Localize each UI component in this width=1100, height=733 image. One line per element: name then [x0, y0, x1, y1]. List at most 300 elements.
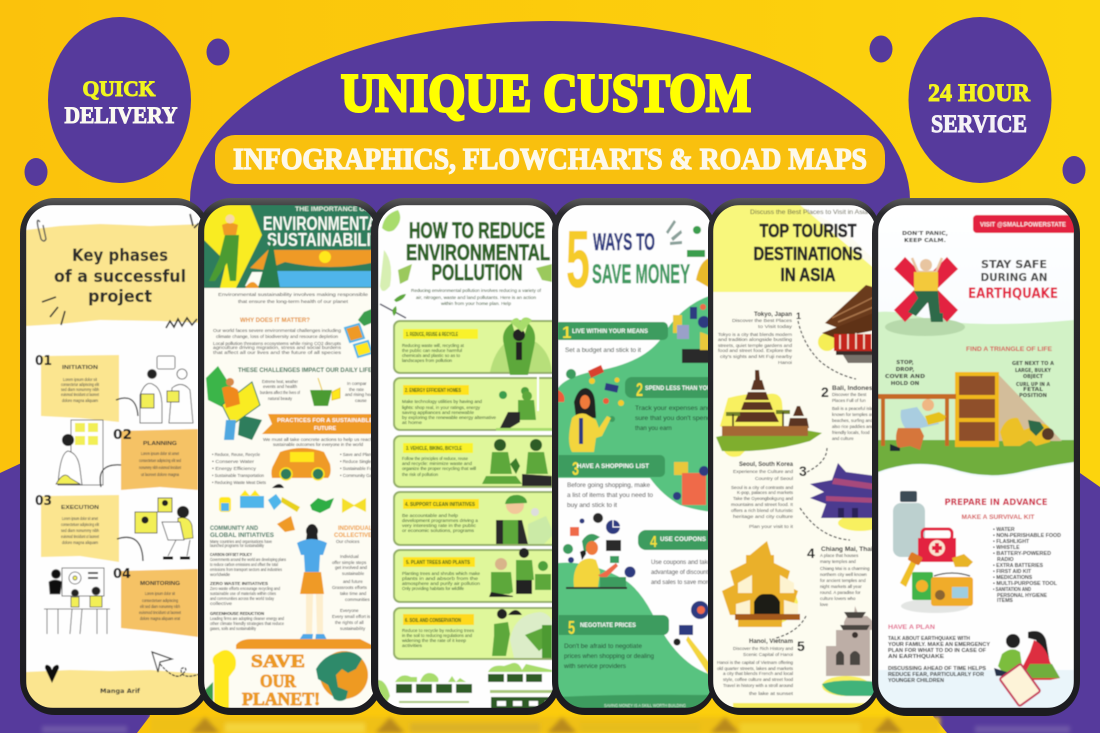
illustration: woman in yellow jacket — [569, 388, 611, 452]
stop 3 seoul: K-pop, palaces and markets — [737, 490, 794, 495]
bottom: save our planet: OUR — [260, 671, 297, 691]
text: stop drop — [885, 360, 925, 387]
step 03 execution: consectetuer adipiscing elit — [61, 522, 100, 527]
stop 4 chiang mai — [807, 545, 886, 607]
intro text — [411, 288, 542, 306]
card 3 — [394, 436, 564, 487]
stop 2 bali: and culture — [832, 436, 854, 441]
section: community and global initiatives: sustainable use of materials within cities — [210, 591, 277, 596]
section: community and global initiatives: collective — [210, 601, 233, 606]
section: community and global initiatives: to reduce carbon emissions and offset the total — [210, 562, 278, 567]
text right of girl: Our choices — [336, 539, 360, 544]
illustration: japanese temple — [818, 285, 876, 363]
orange banner: practices: PRACTICES FOR A SUSTAINABLE — [277, 418, 373, 424]
card 3: the risk of pollution — [402, 472, 439, 477]
title: DESTINATIONS — [754, 244, 862, 264]
icon: paper plane with trail — [152, 652, 202, 676]
header banner — [204, 205, 390, 288]
section: why does it matter: climate change, loss of biodiversity and resource depletion — [216, 334, 339, 339]
badge: quick delivery — [48, 17, 191, 183]
section: why does it matter: that affect all our lives and the future of all species — [213, 350, 342, 355]
orange banner: practices — [262, 414, 376, 434]
step 3 bar — [548, 455, 665, 479]
text right of basket: In compar — [347, 381, 367, 386]
card 1: landscapes from pollution — [402, 358, 453, 363]
text: stop drop: STOP, — [896, 360, 914, 366]
orange banner: practices: FUTURE — [314, 426, 336, 432]
bullet list right: • Save and Plant — [340, 452, 373, 457]
step 2 text: than you earn — [635, 426, 672, 432]
card 5: Only providing habitats for wildlife — [402, 586, 465, 591]
step 01 initiation: euismod tincidunt ut laoreet — [61, 392, 100, 397]
text right of basket — [344, 382, 371, 402]
stop 3 seoul: heritage and city culture — [733, 514, 794, 519]
stop 3 seoul: Country of Seoul — [755, 476, 793, 481]
title: TOP TOURIST — [760, 221, 856, 241]
section: these challenges: THESE CHALLENGES IMPACT OUR DAILY LIFE — [238, 368, 372, 374]
step 5 bar: NEGOTIATE PRICES — [580, 623, 636, 629]
title: stay safe — [968, 258, 1058, 302]
title: stay safe: DURING AN — [980, 271, 1048, 284]
stop 3 seoul: mountains and street food. It — [731, 502, 794, 507]
text: next to object — [1012, 361, 1054, 399]
illustration: woman holding heart leaves — [490, 317, 552, 375]
red tag: VISIT @SMALLPOWERSTATE — [980, 222, 1066, 228]
text: next to object: FETAL — [1023, 387, 1044, 393]
section: community and global initiatives: Many countries and organisations have — [210, 539, 272, 544]
illustration: two people gardening — [482, 439, 552, 486]
step 4 text — [651, 560, 712, 586]
card 2: 2. ENERGY EFFICIENT HOMES — [405, 388, 461, 394]
step 4 text: advantage of discounts — [651, 570, 711, 576]
section: why does it matter: Local pollution threatens ecosystems while rising CO2 disrupts — [213, 341, 342, 346]
step 03 execution: euismod tincidunt ut laoreet — [61, 534, 100, 539]
step 5 bar: 5 — [568, 618, 575, 638]
card 6: in the soil to reducing regulations and — [402, 633, 473, 638]
bullet list left: • Conserve Water — [212, 459, 255, 464]
stop 1 tokyo: Tokyo, Japan — [754, 311, 792, 318]
text right of girl: sustainability — [340, 626, 366, 631]
heading: prepare in advance: MAKE A SURVIVAL KIT — [962, 514, 1035, 521]
intro text: air, nitrogen, waste and land pollutants. Here is an action — [416, 295, 537, 300]
header banner: SUSTAINABILITY — [267, 230, 390, 250]
intro text: within from your home plan. Help — [441, 301, 512, 306]
card 1: 1. REDUCE, REUSE & RECYCLE — [406, 332, 458, 338]
illustration: hand with card — [674, 601, 712, 676]
step 2 text: Track your expenses and — [635, 406, 711, 412]
stop 3 seoul: offers a rich blend of futuristic — [731, 508, 794, 513]
bullet list right: • Sustainable Food — [340, 466, 377, 471]
step 02 planning: ut laoreet dolore magna — [141, 472, 179, 477]
text right of girl: the rights of all — [335, 620, 364, 625]
text right of girl: and future — [343, 579, 363, 584]
floor reflection under phones — [42, 717, 1070, 733]
text: next to object: POSITION — [1019, 393, 1047, 399]
text: next to object: LARGE, BULKY — [1015, 368, 1051, 374]
illustration: shopper with charts — [563, 513, 636, 589]
stop 2 bali: Bali is a peaceful island — [832, 406, 878, 411]
stop 2 bali: also rice paddies and — [832, 424, 874, 429]
stop 1 tokyo: Tokyo is a city that blends modern — [718, 332, 793, 337]
card 5: Planting trees and shrubs which make — [402, 571, 481, 576]
illustration: protester with sign — [206, 366, 262, 440]
step 04 monitoring: dolore magna aliquam erat — [140, 616, 181, 621]
step 2 text: sure that you don't spend — [635, 416, 711, 422]
card 5: atmosphere and purify air pollution — [402, 581, 481, 586]
section: community and global initiatives: GREENHOUSE REDUCTION — [210, 611, 264, 616]
stop 5 hanoi: Hanoi is the capital of Vietnam offering — [717, 660, 794, 665]
card 1: the public can reduce harmful — [402, 348, 462, 353]
card 4: development programmes driving a — [402, 518, 479, 523]
text: don't panic: KEEP CALM. — [904, 238, 946, 244]
stop 5 hanoi: a city that blends French and local — [723, 671, 793, 676]
step 4 text: Use coupons and take — [651, 560, 712, 566]
plan text: YOUR FAMILY. MAKE AN EMERGENCY — [888, 642, 991, 648]
text beside protester: natural beauty — [268, 396, 293, 401]
icons floating — [558, 365, 624, 422]
section: community and global initiatives: emissions from transport sectors and industries — [210, 567, 283, 572]
panel: phone 5 top tourist destinations — [708, 198, 886, 715]
stop 3 seoul: Seoul, South Korea — [739, 461, 793, 468]
stop 5 hanoi: style, coffee culture and street food — [723, 677, 794, 682]
header banner: THE IMPORTANCE OF — [295, 206, 369, 213]
stop 2 bali: 2 — [821, 384, 829, 400]
icons: cubes — [345, 308, 374, 357]
text right of basket: cause — [355, 398, 367, 403]
supply list: PERSONAL HYGIENE — [997, 593, 1047, 599]
heading: prepare in advance: PREPARE IN ADVANCE — [944, 498, 1048, 508]
stop 5 hanoi: Hanoi, Vietnam — [749, 638, 793, 645]
plan text — [888, 636, 991, 684]
card 2: saving appliances and renewable — [402, 410, 475, 415]
bullet list left — [212, 452, 267, 485]
stop 2 bali: Places Full of fun — [832, 398, 866, 403]
section: community and global initiatives: CARBON OFFSET POLICY — [210, 552, 252, 557]
section: why does it matter: agriculture driving migration, stress and social burdens — [213, 345, 342, 350]
bottom: save our planet: SAVE — [251, 651, 305, 671]
step 02 planning: 02 — [113, 428, 132, 443]
step 04 monitoring: consectetuer adipiscing — [142, 598, 178, 603]
illustration: laptop and icons — [673, 304, 712, 363]
title: 5 ways to save money: SAVE MONEY — [592, 259, 690, 289]
stop 2 bali: known for temples and — [832, 412, 877, 417]
stop 5 hanoi: Scenic Capital of Hanoi — [743, 652, 793, 657]
section: community and global initiatives: launched programs for sustainability — [210, 543, 265, 548]
card 4: or economic solutions, programs — [402, 528, 475, 533]
heading: triangle of life: FIND A TRIANGLE OF LIFE — [966, 346, 1053, 353]
text right of girl: get involved and — [335, 565, 368, 570]
title: 5 ways to save money: 5 — [566, 214, 590, 305]
illustration: family planning with clipboard — [994, 631, 1060, 706]
icon: heart — [45, 665, 59, 683]
stop 1 tokyo: streets, quiet temple gardens and — [718, 343, 793, 348]
title: HOW TO REDUCE — [409, 218, 545, 243]
illustration: hanoi pagoda — [822, 606, 876, 696]
subtitle pill: INFOGRAPHICS, FLOWCHARTS & ROAD MAPS — [233, 141, 867, 176]
bullet list right: • Community Gardens — [340, 473, 384, 478]
stop 3 seoul: Plan your visit to it — [749, 524, 794, 529]
plan text: REDUCE FEAR, PARTICULARLY FOR — [888, 672, 984, 678]
text right of basket: and rising hea — [345, 392, 373, 397]
illustration: golden thai temple — [722, 541, 800, 627]
step 4 bar — [638, 530, 728, 551]
bottom yellow band — [733, 703, 876, 708]
text right of girl: INDIVIDUAL — [338, 526, 373, 532]
plan text: AN EARTHQUAKE — [888, 654, 945, 660]
text: don't panic: DON'T PANIC, — [902, 231, 948, 237]
badge: 24 hour service: SERVICE — [931, 111, 1027, 138]
text right of girl: Every small effort is — [332, 614, 371, 619]
stop 5 hanoi: the lake at sunset — [749, 691, 794, 696]
stop 5 hanoi: 5 — [797, 638, 805, 654]
text right of girl: Individual — [340, 554, 359, 559]
intro text: that ensure the long-term health of our planet — [238, 299, 349, 304]
bottom strip with footer text — [558, 695, 712, 708]
section: community and global initiatives: other climate friendly strategies that reduce — [210, 621, 284, 626]
step 02 planning: PLANNING — [143, 441, 177, 447]
step 3 text: Before going shopping, make — [567, 483, 651, 489]
section: community and global initiatives — [210, 525, 287, 631]
title — [754, 221, 862, 285]
stop 2 bali: beaches, surfing and — [832, 418, 873, 423]
step 02 planning — [113, 428, 198, 490]
stop 1 tokyo: and tradition alongside bustling — [718, 337, 793, 342]
route dashes — [776, 321, 856, 638]
step 04 monitoring — [113, 567, 198, 637]
green wave backgrounds — [558, 295, 712, 708]
step 01 initiation: INITIATION — [62, 365, 99, 371]
signature: Manga Arif — [100, 688, 140, 695]
section: community and global initiatives: Governments around the world are developing plans — [210, 557, 287, 562]
step 01 initiation — [35, 354, 119, 422]
card 2: by exploring the renewable energy alternative — [402, 415, 497, 420]
text: next to object: OBJECT — [1023, 374, 1043, 380]
header banner: ENVIRONMENTAL — [263, 214, 386, 235]
card 1: chemicals and plastic so as to — [402, 353, 461, 358]
stop 4 chiang mai: A place that houses — [820, 553, 859, 558]
card 2 — [394, 375, 564, 431]
stop 5 hanoi: Discover the Rich History and — [733, 646, 794, 651]
title: IN ASIA — [780, 265, 836, 285]
step 01 initiation: sed diam nonummy nibh — [61, 387, 99, 392]
card 5: plants in and absorb from the — [402, 576, 479, 581]
card 4: Be accountable and help — [402, 513, 459, 518]
bottom: save our planet: PLANET! — [242, 689, 320, 709]
text right of girl: Grassroots efforts — [332, 585, 368, 590]
section: community and global initiatives: worldwide — [210, 572, 231, 577]
illustration: two people planning — [140, 356, 193, 423]
step 5 text — [563, 644, 654, 670]
illustration: technician in green cap — [496, 495, 554, 544]
card 2: Make technology utilities by having and — [402, 399, 483, 404]
step 3 text — [567, 483, 654, 509]
panel: phone 6 earthquake safety — [872, 198, 1083, 716]
bottom: save our planet — [205, 649, 376, 709]
illustration: remote meeting — [135, 498, 193, 558]
stop 4 chiang mai: love — [820, 602, 829, 607]
badge: 24 hour service — [908, 17, 1052, 183]
step 2 bar — [625, 377, 725, 400]
doodles near title — [666, 220, 710, 288]
icon: paperclip — [37, 220, 46, 241]
arrow 1 — [116, 398, 138, 416]
pale lower tint — [878, 670, 1074, 708]
step 5 bar — [548, 615, 669, 638]
panel: phone 3 reduce environmental pollution — [371, 198, 564, 715]
text: stop drop: HOLD ON — [891, 381, 920, 387]
text under banner — [263, 437, 374, 447]
step 01 initiation: 01 — [35, 354, 52, 369]
step 2 bar: 2 — [636, 380, 643, 400]
supply list: ITEMS — [997, 598, 1013, 604]
decorative dots — [24, 36, 1086, 186]
title: key phases — [54, 246, 186, 307]
step 1 bar: 1 — [562, 323, 571, 342]
step 01 initiation: dolore magna aliquam — [62, 398, 98, 403]
card 6: Reduce to recycle by reducing trees — [402, 628, 475, 633]
stop 4 chiang mai: round. A paradise for — [820, 590, 861, 595]
card 3: and recycle: minimize waste and — [402, 461, 473, 466]
illustration: team at table — [44, 568, 110, 634]
stop 1 tokyo: 1 — [796, 311, 801, 321]
stop 3 seoul — [731, 461, 807, 529]
step 04 monitoring: MONITORING — [140, 581, 180, 587]
text beside protester — [260, 379, 301, 401]
supply list: • SANITATION AND — [993, 587, 1031, 593]
stop 4 chiang mai: culture lovers who — [820, 596, 856, 601]
step 03 execution: dolore magna aliquam — [62, 540, 98, 545]
card 6: activities — [402, 643, 423, 648]
card 1: Reducing waste will, recycling at — [402, 343, 465, 348]
supply list: • MEDICATIONS — [993, 575, 1033, 581]
stop 1 tokyo: to Visit today — [758, 324, 793, 329]
title: ENVIRONMENTAL — [406, 240, 550, 265]
step 03 execution — [35, 494, 119, 562]
stop 2 bali: Bali, Indonesia — [832, 385, 878, 392]
section: community and global initiatives: Zero waste efforts encourage recycling and — [210, 586, 280, 591]
title — [406, 218, 550, 285]
subtitle pill — [215, 135, 885, 184]
intro text: Environmental sustainability involves making responsible — [218, 292, 369, 297]
stop 4 chiang mai: Chiang Mai is a charming — [820, 566, 870, 571]
bullet list right: • Reduce Single — [340, 459, 372, 464]
illustration: person with world map — [492, 609, 555, 658]
step 03 execution: Lorem ipsum dolor sit amet — [62, 516, 99, 521]
step 4 bar: 4 — [650, 534, 657, 551]
section: community and global initiatives: Leading firms are adopting cleaner energy and — [210, 616, 284, 621]
step 1 bar — [548, 322, 668, 342]
icon: globe — [320, 651, 368, 699]
step 2 bar: SPEND LESS THAN YOU — [645, 386, 711, 392]
badge: quick delivery: DELIVERY — [64, 103, 178, 128]
text under banner: sustainable outcomes for everyone in the world — [273, 442, 364, 447]
text: next to object: GET NEXT TO A — [1012, 361, 1054, 367]
supply list: • BATTERY-POWERED — [993, 551, 1051, 557]
card 6: widening the the rate of it keep — [402, 638, 467, 643]
section: community and global initiatives: COMMUNITY AND — [210, 525, 258, 532]
light green lawn — [878, 312, 1074, 445]
step 3 text: buy and stick to it — [567, 503, 617, 509]
section: community and global initiatives: and communities across the world today — [210, 596, 275, 601]
stop 4 chiang mai: night markets all year — [820, 584, 862, 589]
stop 4 chiang mai: many temples and — [820, 559, 856, 564]
illustration: bali temple — [716, 370, 822, 457]
text right of girl — [332, 526, 373, 631]
step 04 monitoring: euismod tincidunt ut laoreet — [139, 610, 182, 615]
card 2: at home — [402, 420, 423, 425]
heading: prepare in advance — [944, 498, 1048, 521]
section: why does it matter: WHY DOES IT MATTER? — [240, 318, 310, 324]
illustration: survival kit — [893, 491, 973, 613]
plan text: PLAN FOR WHAT TO DO IN CASE OF — [888, 648, 986, 654]
red tag — [973, 215, 1083, 233]
doodles around title — [42, 214, 199, 328]
illustration: planters — [378, 663, 554, 708]
intro text: Reducing environmental pollution involves reducing a variety of — [411, 288, 542, 293]
stop 5 hanoi — [717, 638, 805, 696]
text right of girl: sustainable — [342, 571, 365, 576]
purple central dome — [190, 21, 910, 240]
illustration: people planting — [489, 548, 551, 597]
card 4: 4. SUPPORT CLEAN INITIATIVES — [405, 502, 475, 508]
stop 1 tokyo: food and street food. Explore the — [718, 348, 793, 353]
badge: 24 hour service: 24 HOUR — [928, 80, 1031, 107]
card 3: Follow the principles of reduce, reuse — [402, 456, 468, 461]
panel: phone 2 environmental sustainability — [198, 198, 390, 715]
card 4: very interesting rate in the public — [402, 523, 477, 528]
row of small eco icons — [219, 490, 366, 513]
bullet list left: • Sustainable Transportation — [212, 473, 265, 478]
title: key phases: Key phases — [72, 246, 168, 266]
stop 5 hanoi: Travel in history with a stroll around — [723, 683, 794, 688]
step 03 execution: EXECUTION — [61, 505, 100, 511]
title: 5 ways to save money — [566, 214, 690, 305]
card 1 — [394, 317, 564, 375]
text beside protester: Extreme heat, weather — [262, 379, 298, 384]
supply list: • FIRST AID KIT — [993, 569, 1032, 575]
supply list: • WHISTLE — [993, 545, 1020, 551]
stop 4 chiang mai: 4 — [807, 545, 815, 561]
section: community and global initiatives: ZERO WASTE INITIATIVES — [210, 581, 268, 586]
background: lower-left purple shape — [0, 452, 150, 733]
bullet list left: • Reduce, Reuse, Recycle — [212, 452, 261, 457]
step 4 text: and sales to save more — [651, 580, 712, 586]
illustration: red x and running man — [885, 257, 965, 336]
plan text: YOUNGER CHILDREN — [888, 678, 944, 684]
step 02 planning: consectetuer adipiscing elit sed — [139, 458, 181, 463]
section: why does it matter: Our world faces severe environmental challenges including — [213, 328, 342, 333]
step 3 bar: HAVE A SHOPPING LIST — [577, 464, 649, 470]
title: key phases: of a successful — [54, 267, 186, 287]
supply list: • WATER — [993, 527, 1015, 533]
icons: schedule and bills — [673, 462, 709, 505]
text beside protester: events and health — [263, 384, 298, 389]
illustration: person resting with turbine — [496, 375, 556, 431]
card 2: lights: shop real, in your ratings, energy — [402, 405, 481, 410]
step 02 planning: nonummy nibh euismod tincidunt — [139, 465, 182, 470]
decorative leaves top — [380, 210, 552, 318]
bullet list left: • Energy Efficiency — [212, 466, 257, 471]
card 6 — [394, 608, 564, 659]
stop 3 seoul: Seoul is a city of contrasts and — [731, 485, 794, 490]
stop 5 hanoi: old quarter streets, lakes and markets — [717, 666, 794, 671]
text: stop drop: DROP, — [896, 367, 914, 373]
illustration: korean palace — [810, 463, 882, 531]
text right of girl: offer simple steps — [332, 560, 367, 565]
supply list: • EXTRA BATTERIES — [993, 563, 1044, 569]
supply list: • FLASHLIGHT — [993, 539, 1030, 545]
stop 3 seoul: Take the Gyeongbokgung and — [733, 496, 794, 501]
